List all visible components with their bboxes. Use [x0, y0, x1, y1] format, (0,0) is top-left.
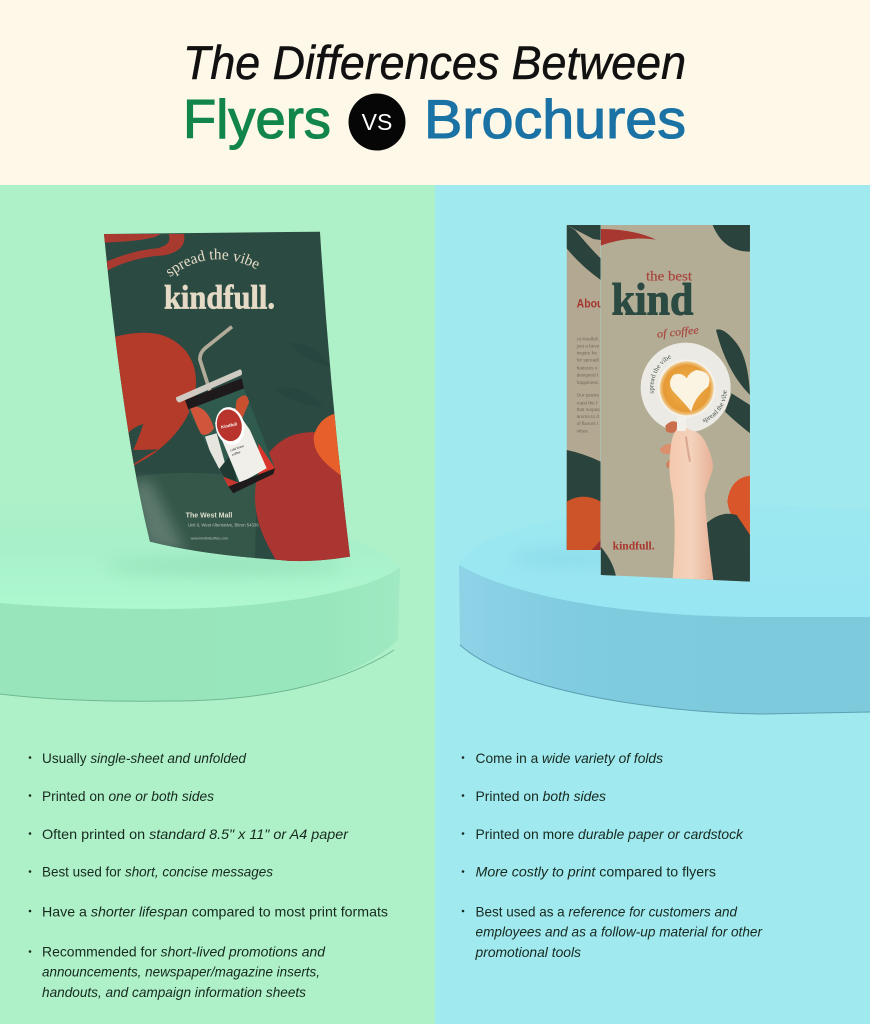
brochure text: kindfull logo: kindfull.	[613, 540, 655, 552]
flyer illustration: straw	[200, 327, 232, 393]
brochure back paragraph: aroma to d	[577, 414, 599, 419]
flyer text: address: Unit 6, West Alternative, Bitron 54336	[188, 523, 259, 528]
flyer illustration: coffee cup	[176, 369, 275, 493]
flyer orange blob	[314, 414, 341, 476]
brochure back paragraph: happiness.	[577, 380, 599, 385]
brochures bullet 5: promotional tools	[474, 945, 581, 960]
brochure back paragraph: designed t	[577, 372, 599, 377]
brochure image: saucer and coffee	[640, 342, 731, 432]
badge: vs: VS	[362, 109, 392, 135]
brochures bullet 3: Printed on more durable paper or cardstock	[476, 827, 744, 842]
flyer illustration: coffee cup: coffee	[231, 450, 241, 457]
panel: flyers background	[0, 185, 435, 1024]
brochures bullet 2: Printed on both sides	[476, 789, 606, 804]
brochure back paragraph: features o	[577, 365, 598, 370]
brochures bullet 5: employees and as a follow-up material for other	[476, 924, 762, 940]
flyers bullet 6	[29, 944, 325, 1000]
flyers bullet 6: handouts, and campaign information sheets	[42, 985, 306, 1000]
brochure image: saucer and coffee: spread the vibe	[650, 355, 672, 394]
podium: right	[459, 505, 870, 714]
flyers bullet 2: Printed on one or both sides	[42, 789, 214, 804]
brochure back paragraph: roast the f	[577, 400, 598, 405]
background: header band	[0, 0, 870, 185]
flyer red blob right	[255, 432, 350, 562]
brochure front panel	[600, 225, 750, 582]
brochure text: kind: kind	[612, 274, 693, 324]
brochure back paragraph: inspire fre	[577, 350, 598, 355]
heading: flyers: Flyers	[183, 88, 331, 150]
brochure back paragraph: that surpas	[577, 407, 600, 412]
flyer text: kindfull: kindfull.	[164, 279, 275, 316]
brochure back paragraph: of flavors t	[577, 421, 599, 426]
flyers bullet 4: Best used for short, concise messages	[42, 864, 273, 880]
brochure back heading: Abou	[577, 297, 603, 311]
brochure red swoosh	[601, 229, 656, 246]
flyers bullet 5: Have a shorter lifespan compared to most print formats	[42, 904, 388, 920]
heading: the differences between: The Differences Between	[183, 36, 686, 89]
brochures bullet 5: Best used as a reference for customers and	[476, 904, 737, 920]
brochures bullet 5	[462, 904, 762, 960]
flyers bullet 6: Recommended for short-lived promotions and	[42, 944, 325, 960]
brochure mockup	[566, 225, 750, 582]
brochure back panel	[567, 225, 603, 550]
brochure image: hand and arm	[660, 417, 713, 580]
podium: left	[0, 503, 400, 701]
flyer dark leaf	[128, 424, 158, 464]
brochure right leaf	[716, 329, 750, 395]
flyer illustration: coffee cup: Kindfull	[221, 421, 237, 430]
list: flyers	[29, 751, 388, 1000]
flyers bullet 1: Usually single-sheet and unfolded	[42, 751, 246, 766]
badge: vs	[348, 94, 406, 150]
brochure back paragraph: for spreadi	[577, 357, 599, 362]
flyer faint dark leaves	[330, 364, 331, 366]
flyer lower shade	[132, 473, 257, 563]
flyer red blob left	[115, 332, 196, 466]
brochure orange shape	[727, 476, 750, 537]
brochure dark blob	[705, 514, 750, 583]
flyer text: the west mall: The West Mall	[186, 512, 232, 519]
brochure back paragraph: Our passio	[577, 393, 600, 398]
flyer text: spread the vibe: spread the vibe	[167, 248, 259, 277]
brochure back paragraph	[576, 337, 600, 433]
brochure text: the best: the best	[646, 269, 692, 284]
list: brochures	[462, 751, 762, 960]
flyer sheen	[136, 477, 186, 549]
brochure back paragraph: vibes.	[577, 428, 589, 433]
panel: brochures background	[435, 185, 870, 1024]
brochure top-right dark shape	[713, 225, 750, 252]
flyer decorative red wave	[104, 234, 184, 272]
flyer illustration: coffee cup: cold brew	[230, 444, 245, 453]
brochures bullet 4: More costly to print compared to flyers	[476, 864, 716, 880]
flyer text: website: www.kindfullcoffee.com	[191, 537, 228, 541]
flyer mockup	[104, 232, 350, 562]
heading: brochures: Brochures	[424, 88, 686, 150]
flyers bullet 6: announcements, newspaper/magazine inserts,	[42, 964, 320, 980]
brochure back paragraph: At Kindfull,	[577, 337, 599, 342]
brochure back paragraph: just a beve	[576, 344, 600, 349]
flyers bullet 3: Often printed on standard 8.5" x 11" or A4 paper	[42, 827, 348, 842]
brochures bullet 1: Come in a wide variety of folds	[476, 751, 663, 766]
brochure image: saucer and coffee: spread the vibe	[702, 390, 727, 423]
title	[183, 36, 686, 150]
brochure dark corner	[601, 547, 616, 577]
brochure text: of coffee: of coffee	[656, 324, 700, 341]
